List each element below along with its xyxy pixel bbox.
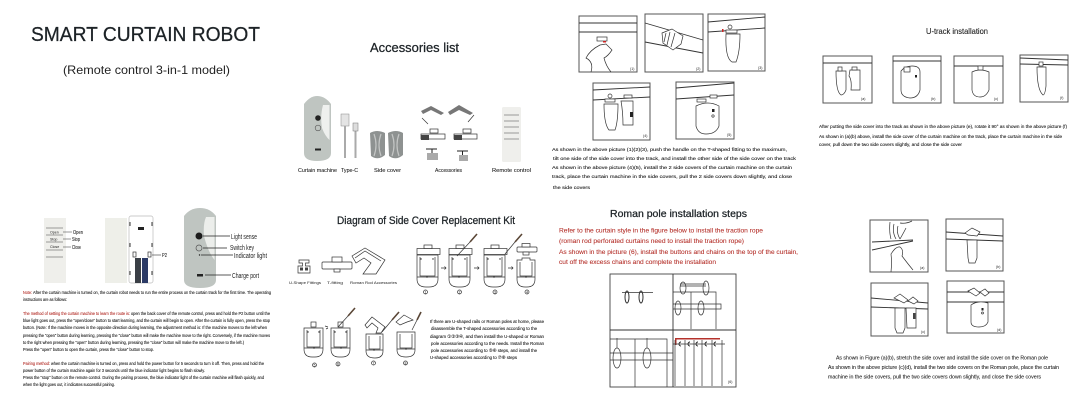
panel: accessories list — [298, 40, 531, 174]
step 8 — [396, 312, 421, 365]
icon: accessories set — [421, 105, 477, 161]
step 7: 7 — [372, 361, 374, 365]
text: pairing method: when the light goes out, it indicates successful pairing. — [23, 382, 115, 387]
text: T-track instructions: track, place the curtain machine in the side covers, pull the 2 side covers down slightly, and close — [552, 174, 792, 179]
icon: T-fitting — [322, 257, 352, 285]
panel: remote and machine operation — [23, 208, 271, 387]
figure 5: machine installed on T-track: (5) — [727, 133, 731, 137]
text: U-track instructions — [819, 124, 1067, 147]
text: note and route learning instructions: pressing the "open" button during learning, pressing the "close" button will make the machine move to the right. Conversely, if the machine moves — [23, 333, 271, 338]
step 2 — [449, 234, 477, 294]
icon: remote control — [502, 107, 521, 162]
figure b: cover on Roman pole — [946, 219, 1003, 271]
step 3: 3 — [494, 290, 496, 294]
figure: remote control buttons — [44, 218, 83, 283]
text: note and route learning instructions: button. (Note: If the machine moves in the opposite direction during learning, the adjustment method is: If the machine moves to the left when — [23, 325, 267, 330]
text: replacement kit instructions: pole accessories according to ⑤⑥ steps, and install the — [431, 348, 537, 353]
text: red instructions: As shown in the picture (6), install the buttons and chains on the top of the curtain, — [559, 249, 798, 256]
step 4 — [517, 244, 537, 294]
text: T-track instructions: As shown in the above picture (1)(2)(3), push the handle on the T-shaped fitting to the maximum, — [552, 147, 787, 152]
figure 3: side cover on track: (3) — [758, 66, 762, 70]
figure: curtain machine callouts: Charge port — [232, 273, 259, 280]
step 7 — [365, 312, 399, 365]
heading: Roman pole installation steps: Roman pole installation steps — [610, 209, 747, 220]
figure: curtain ring grid: (6) — [728, 380, 732, 384]
text: note and route learning instructions: open the back cover of the remote control, press and hold the P2 button until the — [131, 311, 270, 316]
figure 4: machine entering cover — [593, 83, 650, 140]
figure c: machine back view — [954, 56, 1003, 103]
text: red instructions: Refer to the curtain style in the figure below to install the traction rope — [559, 228, 764, 234]
panel: side cover replacement kit — [289, 215, 544, 367]
figure a: hands stretching cover: (a) — [920, 266, 924, 270]
figure d: side view rotated: (f) — [1060, 96, 1063, 100]
text: Roman pole instructions: As shown in the above picture (c)(d), install the two side covers on the Roman pole, place the curtain — [828, 365, 1059, 371]
figure: remote control buttons: Stop — [72, 237, 80, 243]
text: U-track instructions: As shown in (a)(b) above, install the side cover of the curtain machine on the track, place the curtain machine in the side — [819, 134, 1062, 139]
text: note and route learning instructions: The method of setting the curtain machine to learn the route is: — [23, 311, 130, 316]
subtitle: (Remote control 3-in-1 model) — [63, 63, 230, 77]
figure c: cover and machine on pole — [871, 283, 928, 336]
labels: accessory names: Type-C — [341, 168, 358, 174]
text: red instructions: (roman rod perforated curtains need to install the traction rope) — [559, 238, 744, 245]
figure d: machine on Roman pole: (d) — [997, 328, 1001, 332]
text: Roman pole instructions: As shown in Figure (a)(b), stretch the side cover and install the side cover on the Roman pole — [836, 356, 1048, 362]
text: pairing method: Pairing method: — [23, 361, 50, 366]
text: note and route learning instructions: instructions are as follows: — [23, 297, 67, 302]
text: note and route learning instructions — [23, 290, 271, 352]
text: pairing method: when the curtain machine is turned on, press and hold the power button for 5 seconds to turn it off. Then, press and hold the — [51, 361, 264, 366]
text: replacement kit instructions: diagram ①②③④, and then install the U-shaped or Roman — [430, 334, 544, 339]
labels: accessory names — [298, 168, 531, 174]
text: replacement kit instructions: disassemble the T-shaped accessories according to the — [431, 326, 537, 331]
text: pairing method: power button of the curtain machine again for 3 seconds until the blue indicator light begins to flash slowly. — [23, 368, 205, 373]
icon: Roman rod accessory: Roman Rod Accessories — [350, 281, 397, 285]
figure a: cover and machine on U-track: (a) — [861, 97, 865, 101]
figure 5: machine installed on T-track — [676, 82, 734, 139]
step 8: 8 — [404, 361, 406, 365]
figure b: machine on U-track: (b) — [931, 97, 935, 101]
icon: Type-C cable — [341, 114, 358, 158]
icon: U-shape fitting: U-Shape Fittings — [289, 281, 321, 285]
figure: remote control buttons: Close — [72, 245, 81, 251]
figure 1: hand holding fitting — [579, 16, 637, 72]
figure 2: hand on track — [645, 14, 703, 72]
text: note and route learning instructions: Note: — [23, 290, 32, 295]
figure d: side view rotated — [1020, 55, 1068, 102]
text: note and route learning instructions: blue light goes out, press the "open/close" button to start learning, and the curtain will begin to open. After the curtain is fully open, press the stop — [23, 318, 270, 323]
arrow: step 1 to 2 — [441, 266, 446, 270]
figure 3: side cover on track — [708, 14, 765, 71]
text: replacement kit instructions: U-shaped accessories according to ⑦⑧ steps — [430, 355, 518, 360]
figure: remote control buttons: Stop — [50, 238, 57, 242]
icon: side covers — [370, 131, 403, 158]
text: replacement kit instructions — [430, 319, 544, 360]
text: Roman pole instructions — [828, 356, 1059, 380]
text: T-track instructions: the side covers — [553, 185, 591, 190]
panel: Roman pole installation steps — [559, 209, 798, 387]
figure c: machine back view: (c) — [994, 97, 998, 101]
labels: accessory names: Side cover — [374, 168, 401, 174]
icon: T-fitting: T-fitting — [327, 281, 343, 285]
labels: accessory names: Accessories — [435, 168, 462, 174]
icon: curtain machine — [304, 96, 331, 161]
step 5 — [304, 322, 328, 367]
step 1: 1 — [424, 290, 426, 294]
step 3 — [484, 234, 522, 294]
figure: curtain machine callouts: Indicator light — [234, 253, 267, 260]
text: pairing method — [23, 361, 264, 387]
figure 4: machine entering cover: (4) — [643, 134, 647, 138]
step 6: 6 — [337, 362, 339, 366]
step 1 — [417, 245, 440, 294]
figure b: cover on Roman pole: (b) — [996, 265, 1000, 269]
arrow: step 2 to 3 — [474, 266, 479, 270]
text: note and route learning instructions: to the right when pressing the "open" button during learning, pressing the "close" button will make the machine move to the left.) — [23, 340, 244, 345]
panel: cover title — [31, 24, 260, 77]
step 5: 5 — [314, 363, 316, 367]
panel: T-track installation — [552, 14, 797, 190]
step 6 — [331, 308, 355, 366]
figure 2: hand on track: (2) — [696, 67, 700, 71]
heading: accessories list: Accessories list — [370, 40, 459, 55]
figure: remote back cover and P2 button — [105, 216, 167, 283]
figure: curtain machine callouts: Light sense — [231, 234, 257, 241]
figure: remote control buttons: Open — [73, 230, 83, 236]
text: U-track instructions: cover, pull down the two side covers slightly, and close the side cover — [819, 142, 962, 147]
step 2: 2 — [458, 290, 460, 294]
arrow: step 3 to 4 — [508, 266, 513, 270]
text: note and route learning instructions: After the curtain machine is turned on, the curtain robot needs to run the entire process on the curtain track for the first time. The operating — [33, 290, 271, 295]
labels: accessory names: Remote control — [492, 168, 531, 174]
text: pairing method: Press the "stop" button on the remote control. During the pairing process, the blue indicator light of the curtain machine will flash quickly, and — [23, 375, 264, 380]
step 4: 4 — [526, 290, 528, 294]
text: red instructions: cut off the excess chains and complete the installation — [559, 259, 717, 266]
figure: remote control buttons: Open — [50, 230, 59, 234]
figure 1: hand holding fitting: (1) — [630, 67, 634, 71]
heading: side cover replacement kit: Diagram of Side Cover Replacement Kit — [337, 215, 515, 227]
figure a: cover and machine on U-track — [823, 56, 872, 103]
text: T-track instructions — [552, 147, 797, 190]
figure c: cover and machine on pole: (c) — [921, 330, 925, 334]
text: note and route learning instructions: Press the "open" button to open the curtain, press the "close" button to stop. — [23, 347, 154, 352]
figure d: machine on Roman pole — [947, 281, 1004, 333]
title: SMART CURTAIN ROBOT — [31, 24, 260, 46]
figure: curtain machine callouts — [184, 208, 267, 288]
panel: Roman pole cover installation — [828, 219, 1059, 380]
figure b: machine on U-track — [893, 56, 941, 103]
text: replacement kit instructions: pole accessories according to the needs. Install the Roman — [431, 341, 544, 346]
figure: curtain ring grid — [610, 274, 736, 387]
icon: U-shape fitting — [289, 260, 321, 285]
figure: remote control buttons: Close — [50, 245, 59, 249]
figure: remote back cover and P2 button: P2 — [162, 253, 167, 259]
text: T-track instructions: As shown in the above picture (4)(5), install the 2 side covers of the curtain machine on the curtain — [552, 165, 792, 170]
text: T-track instructions: tilt one side of the side cover into the track, and install the other side of the side cover on the track — [553, 156, 797, 161]
icon: Roman rod accessory — [350, 248, 397, 285]
text: Roman pole instructions: machine in the side covers, pull the two side covers down slightly, and close the side covers — [828, 374, 1041, 380]
figure: curtain machine callouts: Switch key — [230, 245, 254, 252]
panel: U-track installation — [819, 27, 1068, 147]
labels: accessory names: Curtain machine — [298, 168, 337, 174]
text: replacement kit instructions: If there are U-shaped rails or Roman poles at home, please — [430, 319, 544, 324]
text: red instructions — [559, 228, 798, 266]
heading: U-track installation: U-track installation — [926, 27, 988, 36]
text: U-track instructions: After putting the side cover into the track as shown in the above picture (e), rotate it 90° as shown in the above picture (f) — [819, 124, 1067, 129]
figure a: hands stretching cover — [870, 220, 928, 272]
